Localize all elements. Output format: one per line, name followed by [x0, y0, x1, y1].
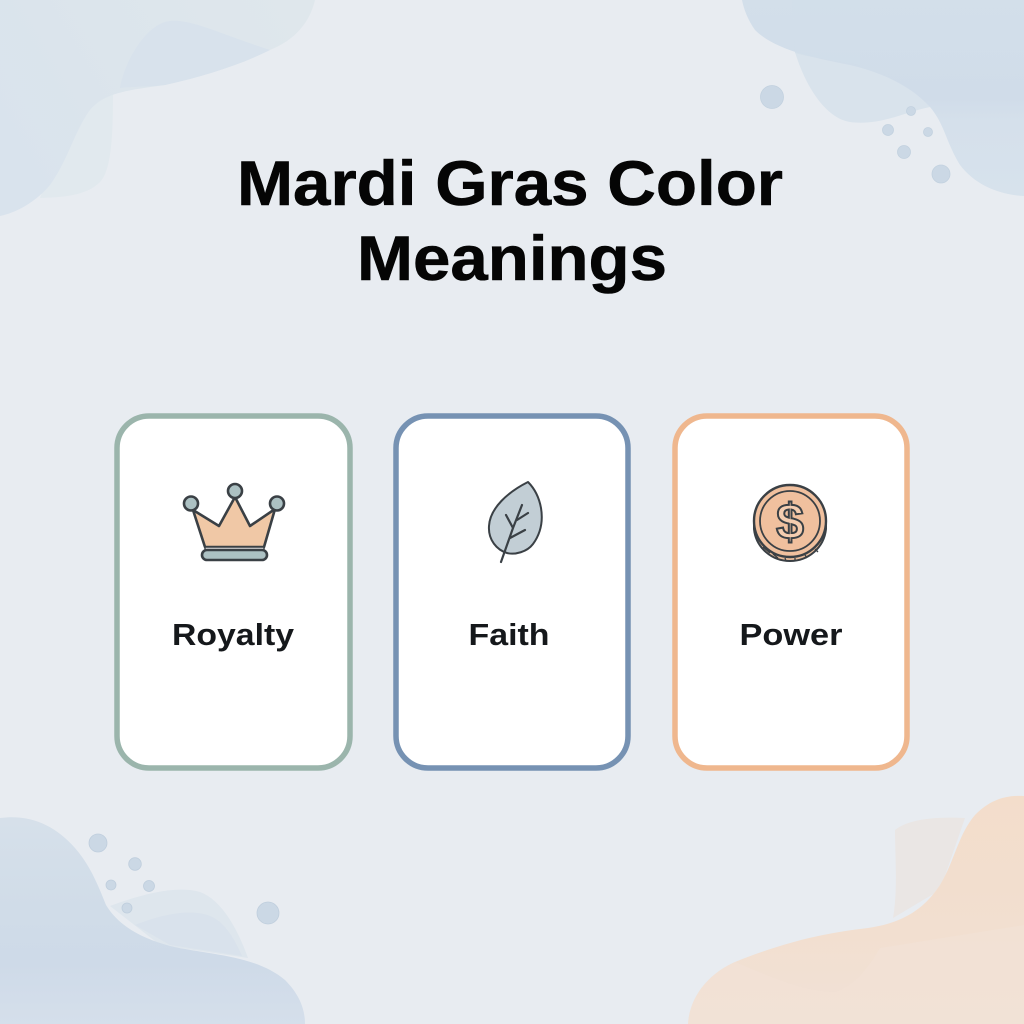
title: Meanings [357, 224, 667, 294]
title [237, 149, 783, 294]
decoration: top-right watercolor blobs [742, 0, 1024, 196]
icon: coin [754, 485, 826, 561]
icon: leaf [489, 482, 542, 562]
decoration: top-right dots [760, 86, 950, 183]
icon: coin: $ [776, 494, 804, 550]
label: royalty: Royalty [172, 617, 295, 652]
panel: faith [396, 416, 628, 768]
label: faith: Faith [468, 617, 550, 652]
decoration: top-left watercolor blobs [0, 0, 315, 216]
title: Mardi Gras Color [237, 149, 783, 219]
decoration: bottom-left dots [89, 834, 279, 924]
icon: crown [184, 484, 284, 560]
panel: power [675, 416, 907, 768]
decoration: bottom-right watercolor blobs [688, 796, 1024, 1024]
decoration: bottom-left watercolor blobs [0, 817, 305, 1024]
panel: royalty [117, 416, 350, 768]
label: power: Power [740, 617, 842, 652]
